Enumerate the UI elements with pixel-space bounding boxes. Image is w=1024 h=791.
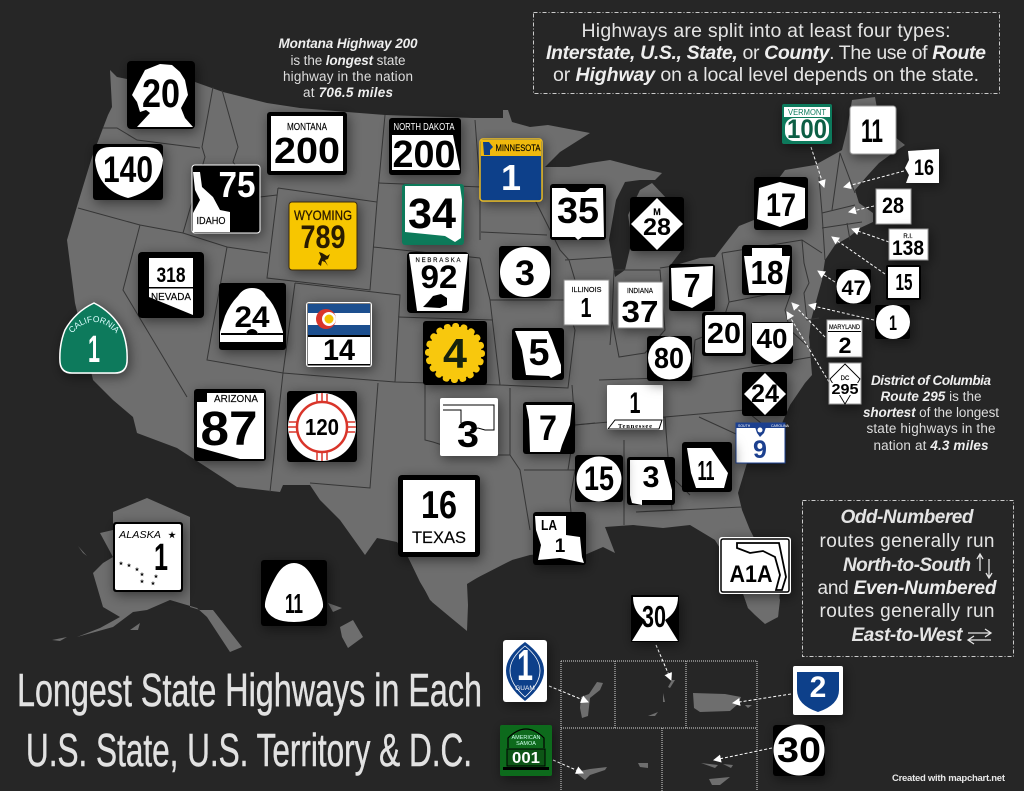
callout: District of Columbia Route 295: [863, 373, 999, 453]
callout: District of Columbia Route 295: shortest of the longest: [863, 405, 999, 420]
sign: Idaho 75: IDAHO: [196, 216, 226, 227]
sign: South Carolina 9: [736, 423, 790, 464]
sign: Illinois 1: [564, 280, 609, 325]
sign: North Carolina 24: 24: [751, 380, 779, 408]
sign: Vermont 100: [782, 104, 832, 144]
sign: Kansas 4: [423, 321, 487, 385]
sign: Montana 200: [267, 112, 347, 175]
sign: Nebraska 92: [407, 252, 469, 313]
map: United States: [52, 70, 905, 652]
sign: Michigan 28: 28: [643, 214, 671, 241]
sign: Colorado 14: [306, 302, 372, 367]
territory inset grid: [561, 661, 757, 791]
sign: Maryland 2: 2: [838, 333, 852, 358]
sign: Nebraska 92: 92: [420, 259, 458, 295]
callout: highway types: Highways are split into at least four types:: [582, 20, 950, 42]
sign: Rhode Island 138: [889, 229, 928, 260]
callout: highway types: [534, 12, 1000, 94]
sign: Pennsylvania 18: 18: [750, 254, 784, 291]
sign: Maryland 2: [827, 320, 862, 358]
sign: Wyoming 789: [289, 202, 357, 270]
sign: California 1: [59, 302, 136, 383]
callout: odd and even routes: and Even-Numbered: [818, 578, 997, 599]
Hawaii: [52, 546, 363, 648]
sign: New York 17: [754, 177, 808, 230]
sign: Arkansas 7: 7: [539, 409, 557, 448]
sign: Hawaii 11: 11: [285, 588, 303, 619]
sign: Kansas 4: 4: [443, 330, 468, 377]
sign: Connecticut 15: 15: [896, 269, 913, 295]
sign: West Virginia 20: 20: [707, 318, 741, 350]
sign: South Dakota 34: [402, 184, 464, 245]
sign: North Dakota 200: NORTH DAKOTA: [394, 122, 455, 133]
callout: highway types: or Highway on a local level depends on the state.: [553, 64, 979, 86]
sign: Illinois 1: ILLINOIS: [572, 285, 602, 294]
sign: Oregon 140: [93, 144, 163, 200]
sign: Georgia 11: [682, 442, 732, 492]
sign: Florida A1A: [719, 537, 791, 594]
sign: Montana 200: 200: [274, 130, 340, 171]
sign: Alabama 3: [627, 457, 675, 505]
sign: Tennessee 1: [607, 385, 663, 430]
sign: Utah 24: 24: [234, 301, 270, 334]
sign: Arizona 87: ARIZONA: [214, 394, 258, 405]
sign: American Samoa 001: 001: [512, 750, 540, 767]
sign: Massachusetts 28: [876, 189, 911, 224]
sign: Illinois 1: 1: [580, 292, 592, 323]
sign: Alaska 1: [113, 522, 183, 592]
sign: New Mexico 120: [287, 391, 357, 462]
sign: Missouri 5: [512, 328, 564, 380]
sign: Alaska 1: ★: [119, 561, 124, 567]
sign: Nebraska 92: NEBRASKA: [416, 258, 460, 264]
sign: Wisconsin 35: 35: [557, 190, 599, 231]
sign: Delaware 1: 1: [889, 312, 897, 335]
sign: Oklahoma 3: [440, 398, 498, 456]
sign: District of Columbia 295: 295: [832, 381, 858, 398]
sign: Montana 200: MONTANA: [287, 122, 327, 133]
sign: Nevada 318: 318: [156, 264, 186, 287]
sign: Arkansas 7: [523, 402, 575, 454]
icon: north and south arrows: [977, 554, 992, 578]
sign: North Carolina 24: [742, 372, 787, 416]
sign: Alaska 1: 1: [154, 537, 168, 579]
sign: Florida A1A: A1A: [730, 561, 772, 588]
title: [17, 664, 482, 776]
highway signs: [59, 61, 942, 780]
callout: District of Columbia Route 295: state highways in the: [866, 421, 996, 436]
sign: Northern Mariana Islands 30: [631, 595, 679, 642]
sign: Ohio 7: [669, 264, 715, 311]
sign: Maine 11: 11: [861, 113, 883, 149]
callout: highway types: Interstate, U.S., State, or County. The use of Route: [546, 42, 986, 64]
sign: Massachusetts 28: 28: [882, 193, 904, 218]
sign: Michigan 28: M: [653, 207, 661, 217]
sign: Alaska 1: ★: [140, 579, 145, 585]
sign: Texas 16: [398, 475, 480, 557]
contiguous states: [67, 70, 905, 630]
sign: Indiana 37: [618, 282, 663, 329]
sign: Arizona 87: [194, 389, 266, 461]
sign: Guam 1: GUAM: [515, 685, 535, 692]
sign: Puerto Rico 2: 2: [810, 671, 826, 704]
sign: Arizona 87: 87: [200, 403, 258, 456]
sign: Michigan 28: [630, 197, 684, 251]
sign: District of Columbia 295: [829, 363, 861, 404]
sign: Nevada 318: NEVADA: [151, 291, 191, 303]
sign: Guam 1: 1: [517, 641, 533, 690]
callout: odd and even routes: Odd-Numbered: [840, 507, 974, 528]
callout: Montana Highway 200: [278, 36, 418, 100]
sign: U.S. Virgin Islands 30: [773, 724, 825, 776]
sign: Washington 20: 20: [142, 72, 180, 116]
sign: Maryland 2: MARYLAND: [829, 325, 861, 331]
sign: Kentucky 80: 80: [654, 343, 684, 375]
sign: Delaware 1: [875, 305, 910, 339]
sign: California 1: 1: [88, 329, 100, 371]
sign: North Dakota 200: [389, 118, 461, 176]
sign: Minnesota 1: MINNESOTA: [496, 143, 541, 154]
sign: South Carolina 9: CAROLINA: [771, 424, 790, 428]
sign: Oregon 140: 140: [103, 149, 153, 190]
sign: New Hampshire 16: [905, 149, 939, 183]
sign: Nevada 318: [138, 252, 204, 318]
sign: New Hampshire 16: 16: [914, 155, 934, 180]
sign: Alaska 1: ★: [127, 563, 132, 569]
sign: Louisiana 1: [533, 512, 586, 565]
sign: Rhode Island 138: 138: [892, 237, 924, 260]
callout: District of Columbia Route 295: nation at 4.3 miles: [874, 438, 989, 453]
sign: Puerto Rico 2: [793, 666, 843, 715]
sign: Oklahoma 3: 3: [457, 414, 479, 455]
sign: Alaska 1: ★: [135, 567, 140, 573]
callout: District of Columbia Route 295: Route 295 is the: [880, 389, 982, 404]
icon: east and west arrows: [968, 629, 991, 644]
sign: Virginia 40: [751, 322, 793, 364]
sign: Vermont 100: 100: [787, 114, 827, 144]
sign: North Dakota 200: 200: [392, 134, 456, 176]
sign: Guam 1: [503, 640, 547, 702]
sign: Indiana 37: INDIANA: [627, 288, 653, 295]
sign: Iowa 3: [499, 246, 551, 298]
sign: U.S. Virgin Islands 30: 30: [777, 731, 821, 770]
sign: Georgia 11: 11: [698, 455, 714, 486]
credit: Created with mapchart.net: [892, 773, 1006, 784]
sign: Alaska 1: ★: [154, 574, 159, 580]
sign: New York 17: 17: [766, 187, 796, 223]
sign: Washington 20: [127, 61, 195, 129]
sign: Alaska 1: ALASKA: [118, 529, 161, 541]
sign: Alabama 3: 3: [642, 461, 660, 494]
Texas southern tip: [400, 500, 520, 631]
arrows: [549, 147, 904, 773]
sign: Connecticut 15: [886, 265, 921, 300]
sign: American Samoa 001: AMERICAN: [511, 735, 541, 741]
sign: Hawaii 11: [261, 560, 327, 626]
callout: Montana Highway 200: Montana Highway 200: [278, 36, 418, 51]
sign: South Carolina 9: 9: [753, 436, 767, 464]
sign: Minnesota 1: 1: [501, 157, 521, 198]
sign: Wisconsin 35: [550, 184, 606, 240]
sign: Idaho 75: 75: [218, 164, 256, 205]
sign: Kentucky 80: [647, 336, 692, 381]
sign: Indiana 37: 37: [622, 294, 658, 329]
sign: California 1: CALIFORNIA: [69, 316, 118, 334]
sign: West Virginia 20: [702, 312, 746, 356]
callout: odd and even routes: routes generally run: [820, 531, 994, 552]
sign: Alaska 1: ★: [140, 572, 145, 578]
title: Longest State Highways in Each: [17, 664, 482, 716]
sign: Tennessee 1: 1: [630, 387, 640, 420]
callout: odd and even routes: routes generally run: [820, 601, 994, 622]
sign: New Mexico 120: 120: [305, 414, 339, 440]
sign: Alaska 1: ★: [151, 581, 156, 587]
sign: Pennsylvania 18: [742, 245, 792, 295]
sign: Virginia 40: 40: [756, 323, 788, 354]
sign: Missouri 5: 5: [528, 332, 550, 373]
callout: odd and even routes: East-to-West: [852, 625, 963, 646]
sign: American Samoa 001: SAMOA: [516, 741, 536, 747]
sign: Utah 24: [219, 283, 286, 350]
callout: odd and even routes: [802, 500, 1014, 656]
sign: New Jersey 47: [836, 269, 871, 304]
sign: District of Columbia 295: DC: [841, 376, 850, 382]
sign: Mississippi 15: [575, 455, 623, 502]
sign: Colorado 14: 14: [323, 334, 355, 367]
sign: Texas 16: 16: [421, 484, 457, 527]
sign: New Jersey 47: 47: [842, 277, 866, 300]
sign: Tennessee 1: Tennessee: [618, 423, 652, 430]
callout: Montana Highway 200: highway in the nation: [283, 69, 413, 84]
sign: Wyoming 789: WYOMING: [294, 207, 352, 223]
callout: Montana Highway 200: at 706.5 miles: [303, 85, 393, 100]
sign: Rhode Island 138: R.I.: [903, 234, 913, 240]
callout: District of Columbia Route 295: District of Columbia: [871, 373, 991, 388]
callout: Montana Highway 200: is the longest state: [290, 53, 406, 68]
sign: Minnesota 1: [480, 139, 542, 201]
callout: odd and even routes: North-to-South: [843, 555, 971, 576]
sign: Alaska 1: ★: [168, 530, 176, 540]
territory island shapes: [575, 680, 752, 785]
sign: Maine 11: [850, 106, 896, 154]
title: U.S. State, U.S. Territory & D.C.: [26, 724, 472, 776]
sign: Louisiana 1: 1: [555, 536, 566, 557]
sign: Iowa 3: 3: [515, 254, 535, 293]
sign: Mississippi 15: 15: [584, 460, 614, 498]
sign: South Carolina 9: SOUTH: [738, 424, 751, 428]
sign: Northern Mariana Islands 30: 30: [642, 599, 666, 634]
sign: Louisiana 1: LA: [541, 517, 557, 534]
sign: Idaho 75: [192, 164, 260, 233]
Alaska: [77, 498, 242, 652]
sign: Wyoming 789: 789: [300, 219, 346, 255]
sign: Vermont 100: VERMONT: [788, 108, 826, 117]
sign: Texas 16: TEXAS: [412, 528, 466, 547]
sign: Ohio 7: 7: [684, 267, 700, 304]
sign: American Samoa 001: [500, 725, 552, 776]
sign: South Dakota 34: 34: [408, 190, 456, 238]
Florida peninsula: [715, 505, 780, 624]
